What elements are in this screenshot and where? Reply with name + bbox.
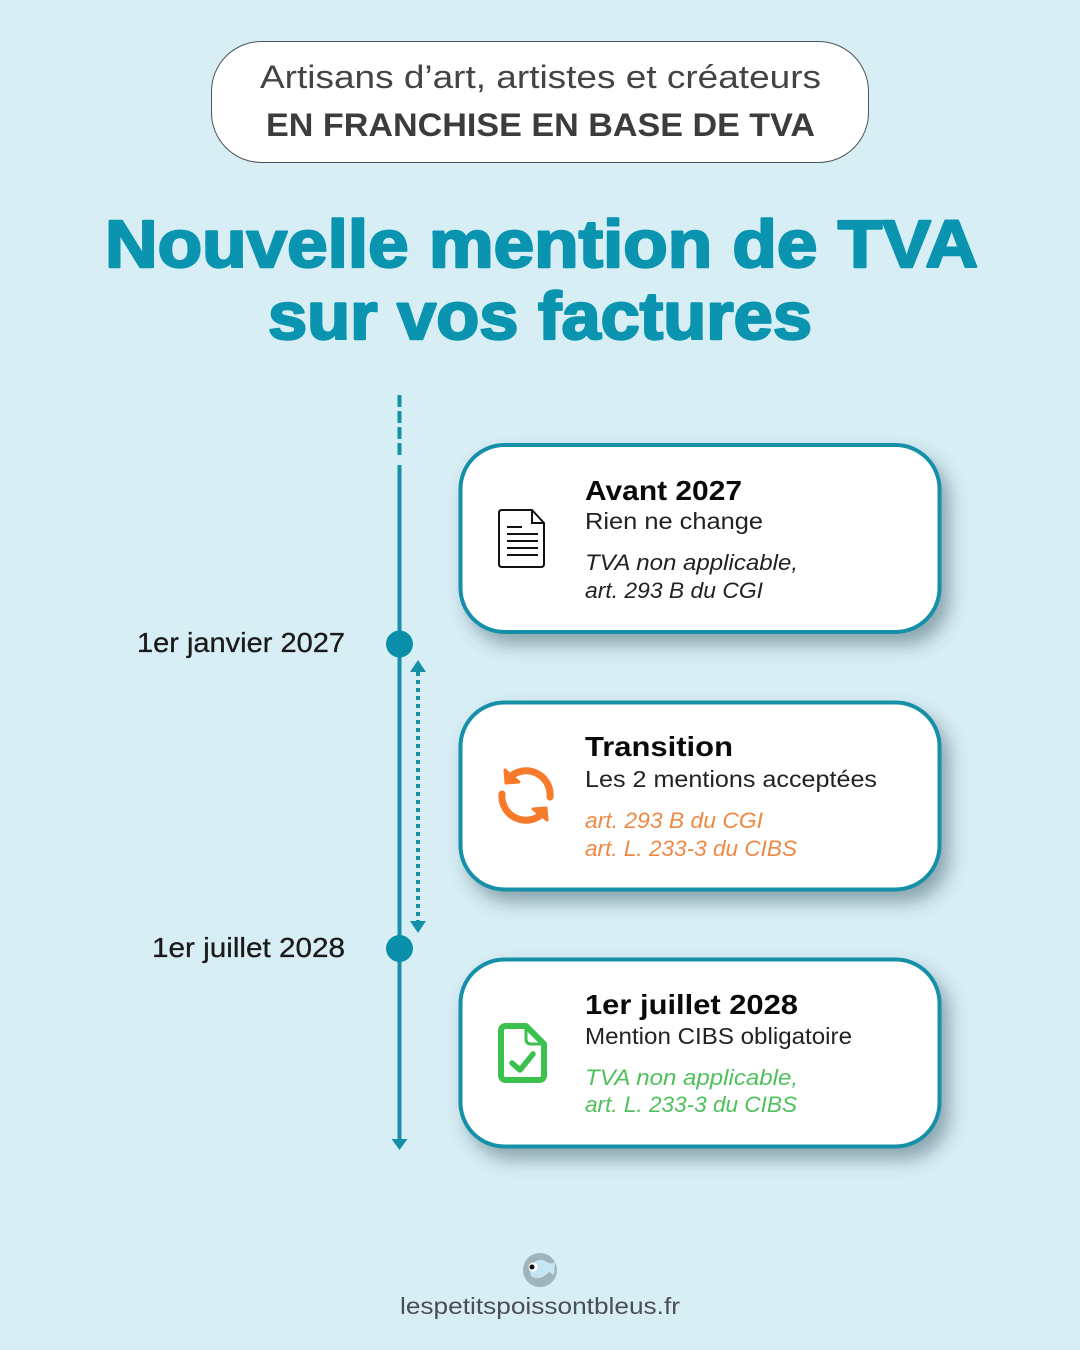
card title: 1er juillet 2028 — [585, 989, 798, 1020]
card mention: TVA non applicable, — [585, 1065, 798, 1090]
card mention: art. L. 233-3 du CIBS — [585, 836, 797, 861]
card: transition — [460, 702, 940, 890]
icon: document — [499, 510, 544, 567]
card mention: TVA non applicable, — [585, 550, 798, 575]
card title: Avant 2027 — [585, 475, 742, 506]
icon: refresh arrows — [502, 770, 550, 820]
logo: fish badge — [523, 1253, 557, 1287]
card mention — [585, 550, 798, 603]
title — [105, 207, 978, 354]
title: Nouvelle mention de TVA — [105, 207, 978, 282]
marker 2027 — [386, 630, 413, 658]
date label 2027: 1er janvier 2027 — [137, 627, 345, 658]
timeline — [386, 395, 413, 1150]
header line 1: Artisans d’art, artistes et créateurs — [260, 59, 821, 95]
header pill — [212, 42, 868, 162]
card mention: art. 293 B du CGI — [585, 808, 763, 833]
card mention: art. L. 233-3 du CIBS — [585, 1092, 797, 1117]
card mention — [585, 808, 797, 861]
timeline end arrow — [392, 1139, 408, 1150]
card mention — [585, 1065, 798, 1117]
card: avant 2027 — [460, 445, 940, 632]
footer website: lespetitspoissontbleus.fr — [400, 1293, 680, 1319]
card subtitle: Les 2 mentions acceptées — [585, 766, 877, 792]
card title: Transition — [585, 731, 733, 762]
transition period double arrow — [410, 660, 426, 933]
marker 2028 — [386, 935, 413, 962]
title: sur vos factures — [268, 279, 812, 354]
card subtitle: Mention CIBS obligatoire — [585, 1023, 852, 1049]
card subtitle: Rien ne change — [585, 508, 763, 534]
header line 2: EN FRANCHISE EN BASE DE TVA — [266, 107, 815, 143]
icon: validated document — [501, 1026, 544, 1080]
date label 2028: 1er juillet 2028 — [152, 932, 345, 963]
card mention: art. 293 B du CGI — [585, 578, 763, 603]
card: 1er juillet 2028 — [460, 960, 940, 1146]
